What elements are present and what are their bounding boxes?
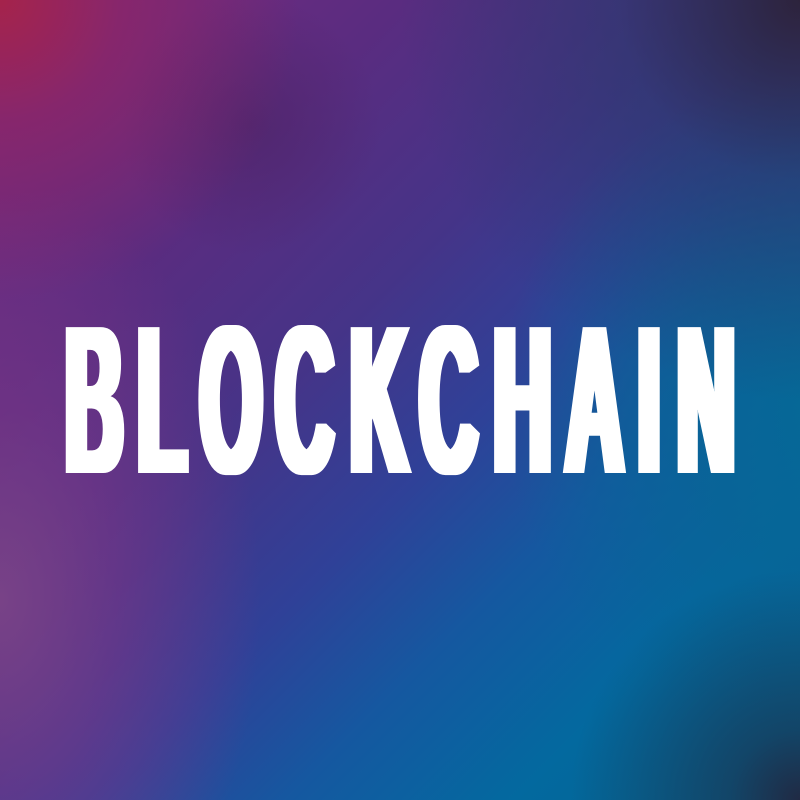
title: BLOCKCHAIN bbox=[65, 281, 735, 518]
